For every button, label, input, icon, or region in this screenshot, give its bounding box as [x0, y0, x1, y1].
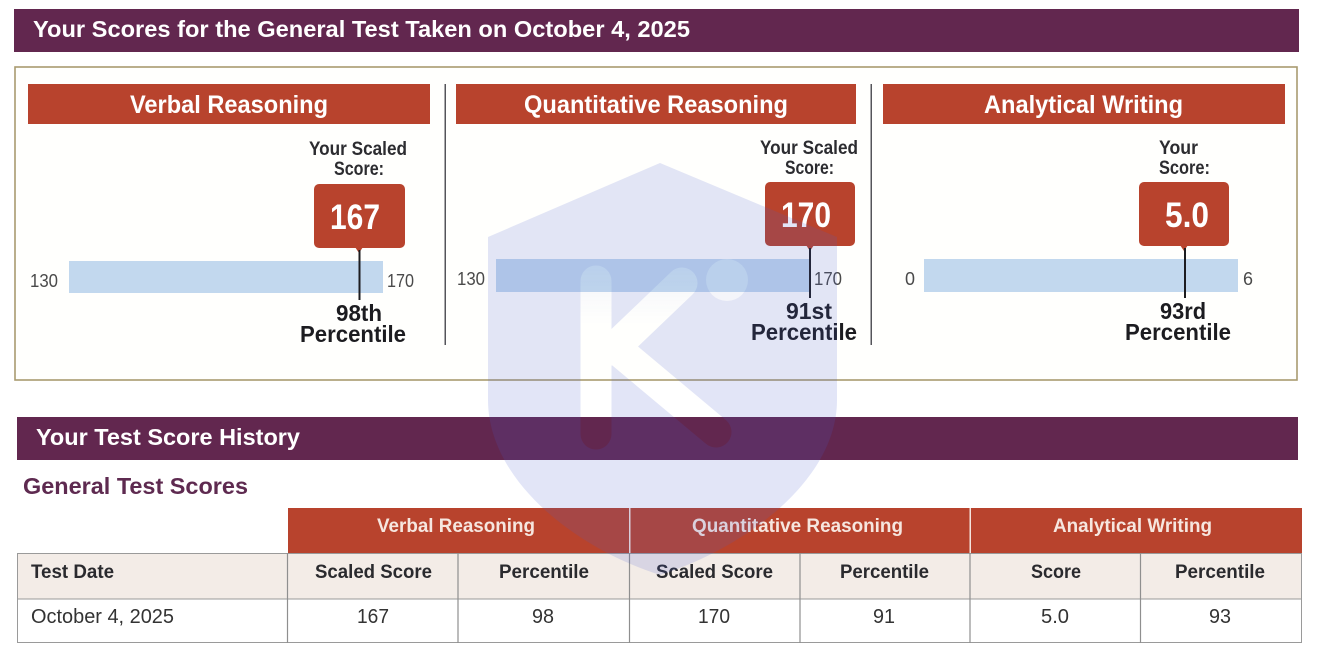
panel: verbal reasoning: Percentile [300, 321, 406, 347]
panel: verbal reasoning: Verbal Reasoning [130, 91, 328, 119]
table row: column titles [18, 554, 1302, 599]
table row: column titles: Scaled Score [315, 562, 432, 583]
table row: column titles: Score [1031, 562, 1081, 583]
table row: column titles: Percentile [499, 562, 589, 583]
subheading: general test scores: General Test Scores [23, 473, 248, 499]
table row: column titles: Percentile [840, 562, 929, 583]
table header: section names [288, 508, 1302, 553]
panel: verbal reasoning: 170 [387, 271, 414, 291]
table row: october 4, 2025 scores: 91 [873, 606, 895, 628]
panel: quantitative reasoning [456, 84, 858, 345]
panel: verbal reasoning: 98th [336, 300, 382, 326]
table row: october 4, 2025 scores: 93 [1209, 606, 1231, 628]
panel: quantitative reasoning: 170 [814, 269, 842, 289]
heading bar: score history: Your Test Score History [36, 424, 300, 450]
panel: analytical writing [883, 84, 1285, 345]
panel: quantitative reasoning: Score: [785, 158, 834, 179]
heading bar: score history [17, 417, 1298, 460]
panel: analytical writing: 5.0 [1165, 196, 1209, 235]
heading bar: scores for the test: Your Scores for the General Test Taken on October 4, 2025 [33, 16, 690, 42]
panel: analytical writing: Your [1159, 138, 1199, 159]
panel: score summary [15, 67, 1297, 380]
panel: quantitative reasoning: Your Scaled [760, 138, 858, 159]
table row: october 4, 2025 scores: 170 [698, 606, 730, 628]
table header: section names: Quantitative Reasoning [692, 516, 903, 537]
table row: column titles: Test Date [31, 562, 114, 583]
table row: october 4, 2025 scores: 167 [357, 606, 389, 628]
panel: verbal reasoning: 130 [30, 271, 58, 291]
panel: verbal reasoning: 167 [330, 198, 380, 237]
table row: column titles: Percentile [1175, 562, 1265, 583]
panel: quantitative reasoning: 91st [786, 298, 832, 324]
panel: verbal reasoning: Score: [334, 159, 384, 180]
table row: october 4, 2025 scores: 98 [532, 606, 554, 628]
panel: analytical writing: Score: [1159, 158, 1210, 179]
panel: quantitative reasoning: 130 [457, 269, 485, 289]
panel: analytical writing: Analytical Writing [984, 91, 1183, 119]
panel: quantitative reasoning: 170 [781, 196, 831, 235]
panel: verbal reasoning [28, 84, 430, 347]
panel: verbal reasoning: Your Scaled [309, 139, 407, 160]
table row: october 4, 2025 scores [18, 599, 1302, 642]
panel: quantitative reasoning: Percentile [751, 319, 857, 345]
table row: october 4, 2025 scores: October 4, 2025 [31, 606, 174, 628]
table: general test scores [18, 508, 1302, 643]
table row: october 4, 2025 scores: 5.0 [1041, 606, 1069, 628]
panel: analytical writing: Percentile [1125, 319, 1231, 345]
heading bar: scores for the test [14, 9, 1299, 52]
panel: analytical writing: 6 [1243, 269, 1253, 289]
table row: column titles: Scaled Score [656, 562, 773, 583]
panel: analytical writing: 93rd [1160, 298, 1206, 324]
panel: quantitative reasoning: Quantitative Reasoning [524, 91, 788, 119]
watermark: shield with letter K [488, 163, 837, 575]
table header: section names: Analytical Writing [1053, 516, 1212, 537]
table header: section names: Verbal Reasoning [377, 516, 535, 537]
panel: analytical writing: 0 [905, 269, 915, 289]
